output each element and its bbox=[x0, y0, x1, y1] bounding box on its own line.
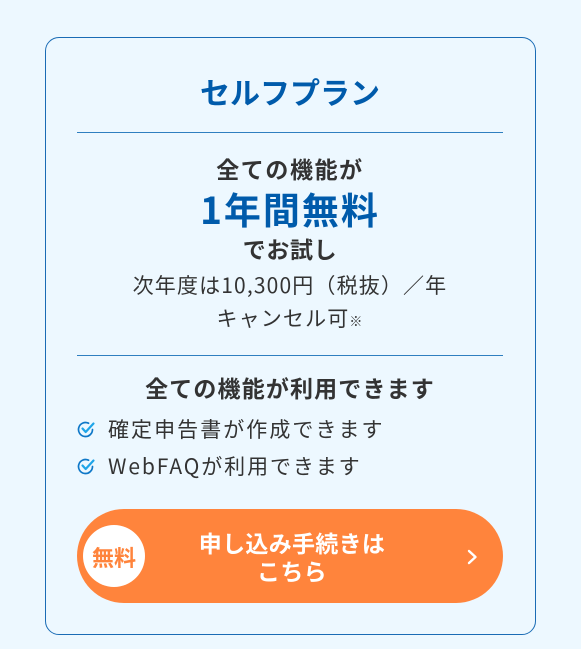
text: try it: でお試し bbox=[243, 231, 337, 265]
icon: check 1 bbox=[78, 422, 95, 438]
heading: all features available: 全ての機能が利用できます bbox=[145, 370, 435, 404]
text: button label: 申し込み手続きは bbox=[199, 525, 385, 559]
icon: check 2 bbox=[78, 458, 95, 474]
text: button label bbox=[199, 525, 385, 587]
panel: self plan card bbox=[45, 37, 536, 635]
text: one year free: 1年間無料 bbox=[200, 181, 380, 235]
badge: free: 無料 bbox=[92, 541, 136, 573]
button: apply bbox=[77, 509, 503, 603]
text: cancellation: キャンセル可※ bbox=[216, 303, 364, 333]
text: next year price: 次年度は10,300円（税抜）／年 bbox=[133, 270, 447, 300]
text: button label: こちら bbox=[257, 553, 327, 587]
heading: plan name: セルフプラン bbox=[200, 69, 380, 113]
badge: free bbox=[83, 525, 145, 587]
icon: chevron bbox=[468, 550, 477, 564]
text: feature 1: 確定申告書が作成できます bbox=[108, 414, 385, 444]
text: all features: 全ての機能が bbox=[216, 151, 364, 185]
text: feature 2: WebFAQが利用できます bbox=[108, 451, 362, 481]
